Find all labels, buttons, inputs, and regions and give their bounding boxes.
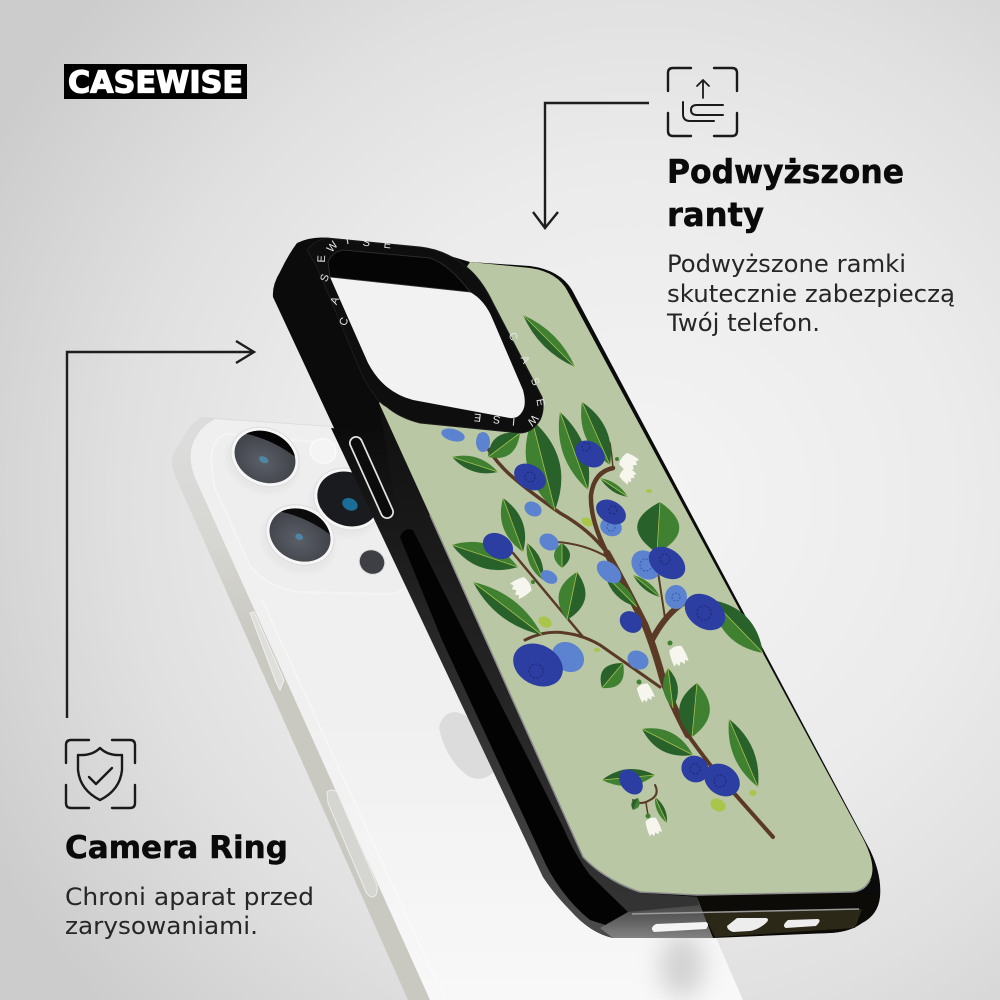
sensor [355,545,389,579]
camera plateau [211,434,409,594]
heading: raised edges: Podwyższone [667,152,904,191]
heading: raised edges [667,152,904,234]
inner wall of ring [328,250,470,292]
ring lettering: S [528,376,542,388]
text: camera ring [65,883,314,940]
speaker hole left [652,922,708,932]
phone case body [273,238,880,938]
soft highlight line along back edge [262,600,445,1000]
lens bumps [216,419,391,585]
icon: raised edges [668,68,737,136]
ring lettering: E [473,411,482,423]
side strip beside the screen [379,403,700,914]
bottom wall, dark part [697,893,878,938]
ring lettering: S [492,413,501,425]
lens 1 [221,416,309,498]
speaker hole right [784,919,820,928]
leaves [452,315,763,823]
ring lettering: C [506,331,520,343]
green screen with branch artwork [379,262,872,895]
volume/camera control pill on case [356,443,387,512]
ring lettering: W [325,239,341,255]
lower outer rim over white phone [331,428,713,938]
dark blueberries [478,435,746,803]
heading: camera ring: Camera Ring [65,830,288,866]
ring lettering: S [318,272,332,283]
bottom wall, translucent part [600,905,713,938]
screen highlight edge [430,515,870,895]
heading: raised edges: ranty [667,195,764,234]
usb port hole [727,918,768,932]
ring lettering: A [518,354,532,366]
camera ring [307,235,547,433]
ring lettering: E [316,255,328,263]
white flowers [509,451,689,838]
apple logo shadow [439,712,496,779]
shadow on the phone back [660,934,704,998]
icon: shield [66,740,135,808]
logo: CASEWISE [68,66,243,100]
camera opening [330,277,525,418]
text: camera ring: zarysowaniami. [65,912,258,940]
branches [480,435,773,837]
text: raised edges: Twój telefon. [666,309,820,337]
ring lettering: A [328,294,343,307]
ring lettering: I [512,415,516,427]
small green buds [536,489,756,814]
ring lettering: E [383,239,392,251]
flash [306,435,340,467]
arrow: to camera ring [67,341,254,718]
ring lettering: C [337,316,351,328]
text: camera ring: Chroni aparat przed [65,883,314,911]
text: raised edges: skutecznie zabezpieczą [667,280,955,308]
ring lettering: S [362,237,371,249]
light blueberries [440,426,687,678]
text: raised edges: Podwyższone ramki [667,250,906,278]
arrow: to raised edges [533,103,649,228]
lens 2 [256,494,344,576]
ring lettering: I [345,235,350,247]
side buttons [250,612,377,897]
lens 3 [304,457,392,541]
white phone behind the case [172,416,743,1000]
ring lettering: W [524,412,540,428]
ring lettering [316,235,547,428]
ring lettering: E [533,398,547,407]
side slot [400,529,628,928]
text: raised edges [666,250,955,337]
